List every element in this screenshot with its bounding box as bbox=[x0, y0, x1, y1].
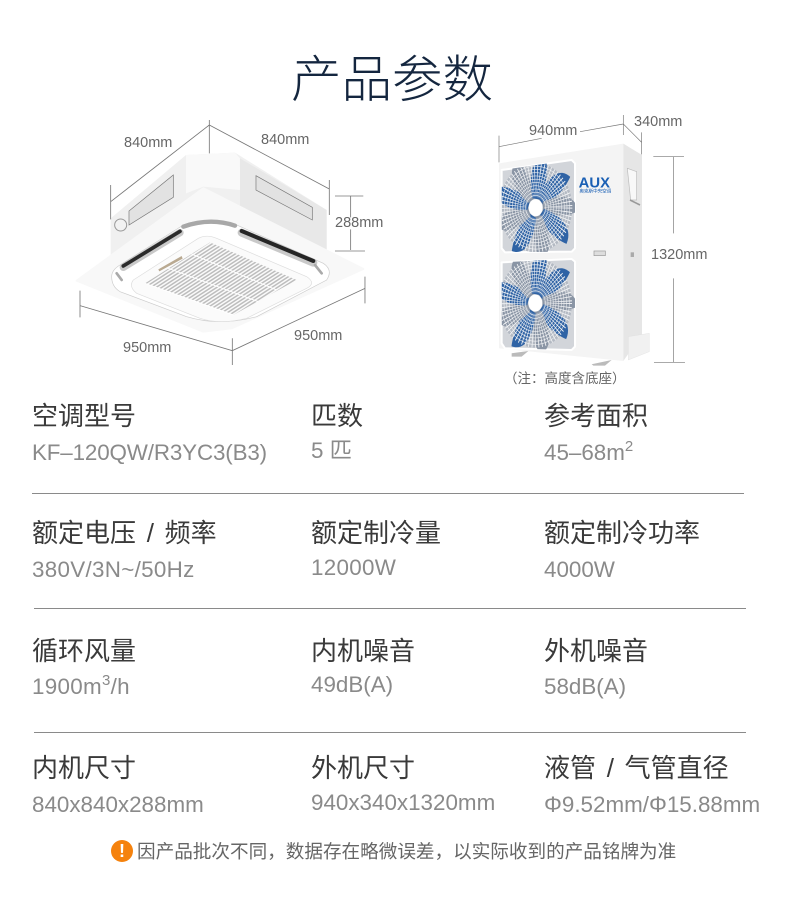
spec: model: 空调型号 bbox=[32, 401, 136, 431]
spec: pipe diameter: Φ9.52mm/Φ15.88mm bbox=[544, 792, 760, 817]
spec: voltage: 380V/3N~/50Hz bbox=[32, 557, 195, 582]
spec: outdoor size bbox=[311, 753, 495, 815]
spec: airflow: 循环风量 bbox=[32, 636, 136, 666]
spec: model: KF–120QW/R3YC3(B3) bbox=[32, 440, 267, 465]
unit cabinet bbox=[499, 144, 649, 366]
spec: outdoor noise: 外机噪音 bbox=[544, 636, 648, 666]
AUX logo: 奥克斯中央空调 bbox=[579, 188, 612, 195]
spec: horsepower: 5 匹 bbox=[311, 438, 352, 463]
spec: area bbox=[544, 401, 648, 465]
dimension label: outdoor height: 1320mm bbox=[651, 247, 707, 263]
spec: voltage bbox=[32, 518, 217, 582]
spec: airflow: 1900m3/h bbox=[32, 672, 130, 699]
dimension label: indoor height: 288mm bbox=[335, 215, 383, 231]
icon: warning: ! bbox=[119, 841, 125, 861]
dimension label: outdoor depth: 340mm bbox=[634, 114, 682, 130]
spec: outdoor size: 外机尺寸 bbox=[311, 753, 415, 783]
indoor cassette unit bbox=[77, 120, 365, 365]
dimension lines bbox=[80, 120, 365, 365]
spec: indoor noise bbox=[311, 636, 415, 697]
spec: outdoor size: 940x340x1320mm bbox=[311, 790, 495, 815]
spec: horsepower: 匹数 bbox=[311, 401, 363, 431]
spec: cooling capacity: 额定制冷量 bbox=[311, 518, 441, 548]
air louvres bbox=[117, 222, 322, 280]
spec: indoor size bbox=[32, 753, 204, 817]
spec: pipe diameter: 液管 / 气管直径 bbox=[544, 753, 729, 783]
dimension label: panel width left: 950mm bbox=[123, 340, 171, 356]
spec: area: 参考面积 bbox=[544, 401, 648, 431]
dimension label: indoor width right: 840mm bbox=[261, 132, 309, 148]
fans bbox=[501, 159, 576, 351]
product diagrams bbox=[80, 115, 685, 366]
spec: cooling power: 额定制冷功率 bbox=[544, 518, 700, 548]
AUX logo: AUX bbox=[579, 176, 610, 192]
spec: cooling capacity: 12000W bbox=[311, 555, 396, 580]
spec: cooling power bbox=[544, 518, 700, 582]
spec: indoor noise: 49dB(A) bbox=[311, 672, 393, 697]
spec: area: 45–68m2 bbox=[544, 438, 633, 465]
spec: outdoor noise: 58dB(A) bbox=[544, 674, 626, 699]
spec: model bbox=[32, 401, 267, 465]
title: 产品参数 bbox=[291, 51, 493, 108]
unit body bbox=[111, 153, 327, 257]
dimension label: indoor width left: 840mm bbox=[124, 135, 172, 151]
spec: cooling capacity bbox=[311, 518, 441, 580]
spec: horsepower bbox=[311, 401, 363, 463]
spec: voltage: 额定电压 / 频率 bbox=[32, 518, 217, 548]
dimension lines bbox=[499, 115, 685, 362]
spec: cooling power: 4000W bbox=[544, 557, 615, 582]
spec: airflow bbox=[32, 636, 136, 699]
spec: pipe diameter bbox=[544, 753, 760, 817]
spec: outdoor noise bbox=[544, 636, 648, 699]
footnote: 因产品批次不同，数据存在略微误差，以实际收到的产品铭牌为准 bbox=[137, 841, 676, 862]
spec: indoor size: 内机尺寸 bbox=[32, 753, 136, 783]
spec: indoor noise: 内机噪音 bbox=[311, 636, 415, 666]
icon: warning bbox=[111, 840, 133, 862]
outdoor unit bbox=[486, 115, 685, 366]
air intake grille bbox=[145, 242, 297, 315]
dimension label: panel width right: 950mm bbox=[294, 328, 342, 344]
dimension label: outdoor width: 940mm bbox=[529, 123, 577, 139]
height note: （注：高度含底座） bbox=[504, 371, 626, 386]
ceiling panel bbox=[77, 188, 363, 332]
spec: indoor size: 840x840x288mm bbox=[32, 792, 204, 817]
